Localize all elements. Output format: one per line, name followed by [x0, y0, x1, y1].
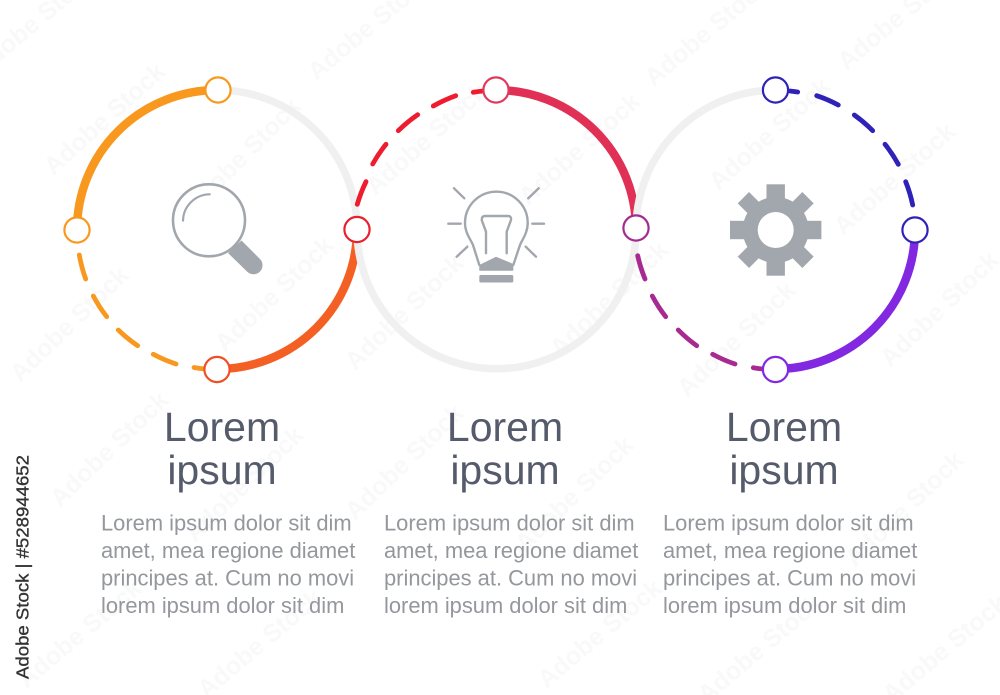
watermark: Adobe Stock [340, 399, 469, 525]
watermark: Adobe Stock [514, 87, 646, 211]
heading 2: Lorem [447, 404, 563, 450]
body text 2: principes at. Cum no movi [384, 566, 637, 590]
watermark: Adobe Stock [12, 574, 147, 694]
stock credit: Adobe Stock | #528944652 [12, 455, 32, 679]
red-orange solid arc [218, 230, 357, 369]
body text 2: Lorem ipsum dolor sit dim [384, 510, 635, 536]
heading 2: ipsum [450, 447, 560, 493]
watermark: Adobe Stock [545, 236, 674, 362]
watermark: Adobe Stock [361, 77, 493, 201]
grey track 3 [636, 90, 776, 228]
body text 2: lorem ipsum dolor sit dim [384, 593, 627, 618]
orange dashed arc [79, 255, 205, 369]
watermark: Adobe Stock [39, 57, 171, 181]
watermark: Adobe Stock [532, 574, 667, 694]
watermark: Adobe Stock [704, 72, 836, 196]
heading 2 [447, 404, 563, 493]
body text 2: amet, mea regione diamet [384, 538, 638, 563]
node: circle 2 right [623, 215, 649, 241]
watermark: Adobe Stock [829, 117, 961, 241]
circle 3: settings step [636, 90, 915, 369]
blue dashed arc [790, 91, 913, 205]
heading 1 [164, 404, 280, 493]
watermark: Adobe Stock [840, 446, 969, 572]
body text 2 [384, 510, 638, 618]
body text 3: Lorem ipsum dolor sit dim [663, 510, 914, 536]
node: circle 3 right [902, 217, 928, 243]
body text 3: lorem ipsum dolor sit dim [663, 593, 906, 618]
body text 1 [101, 510, 355, 618]
watermark: Adobe Stock [340, 249, 469, 375]
node: circle 1 bottom [204, 357, 230, 382]
body text 1: principes at. Cum no movi [101, 566, 354, 590]
node: circle 3 bottom [763, 357, 788, 382]
node: circle 1 right [344, 217, 370, 242]
node: circle 1 top [205, 77, 231, 103]
watermark: Adobe Stock [672, 276, 801, 402]
circle 1: search step [77, 90, 357, 369]
icon: gear [730, 184, 821, 276]
node: circle 2 top [483, 77, 509, 103]
body text 3 [663, 510, 917, 618]
nodes [64, 77, 928, 382]
magenta dashed arc [638, 256, 763, 369]
heading 3: ipsum [729, 447, 839, 493]
grey track 1 [218, 90, 357, 230]
circle 2: idea step [357, 90, 636, 369]
body text 1: lorem ipsum dolor sit dim [101, 593, 344, 618]
red dashed arc [357, 91, 483, 204]
heading 1: Lorem [164, 404, 280, 450]
body text 3: amet, mea regione diamet [663, 538, 917, 563]
watermark: Adobe Stock [178, 92, 306, 220]
purple solid arc [776, 230, 915, 369]
body text 3: principes at. Cum no movi [663, 566, 916, 590]
heading 3: Lorem [726, 404, 842, 450]
icon: light bulb [448, 188, 544, 282]
grey track 2 [357, 229, 636, 369]
icon: magnifying glass [173, 184, 263, 274]
node: circle 1 left [64, 217, 90, 243]
node: circle 3 top [763, 77, 788, 103]
watermark: Adobe Stock [180, 421, 309, 547]
orange solid arc [77, 90, 218, 230]
heading 3 [726, 404, 842, 493]
heading 1: ipsum [167, 447, 277, 493]
body text 1: Lorem ipsum dolor sit dim [101, 510, 352, 536]
watermark: Adobe Stock [210, 231, 339, 357]
watermark: Adobe Stock [5, 261, 134, 387]
body text 1: amet, mea regione diamet [101, 538, 355, 563]
watermark: Adobe Stock [510, 431, 639, 557]
watermark: Adobe Stock [45, 386, 174, 512]
crimson solid arc [496, 90, 636, 228]
